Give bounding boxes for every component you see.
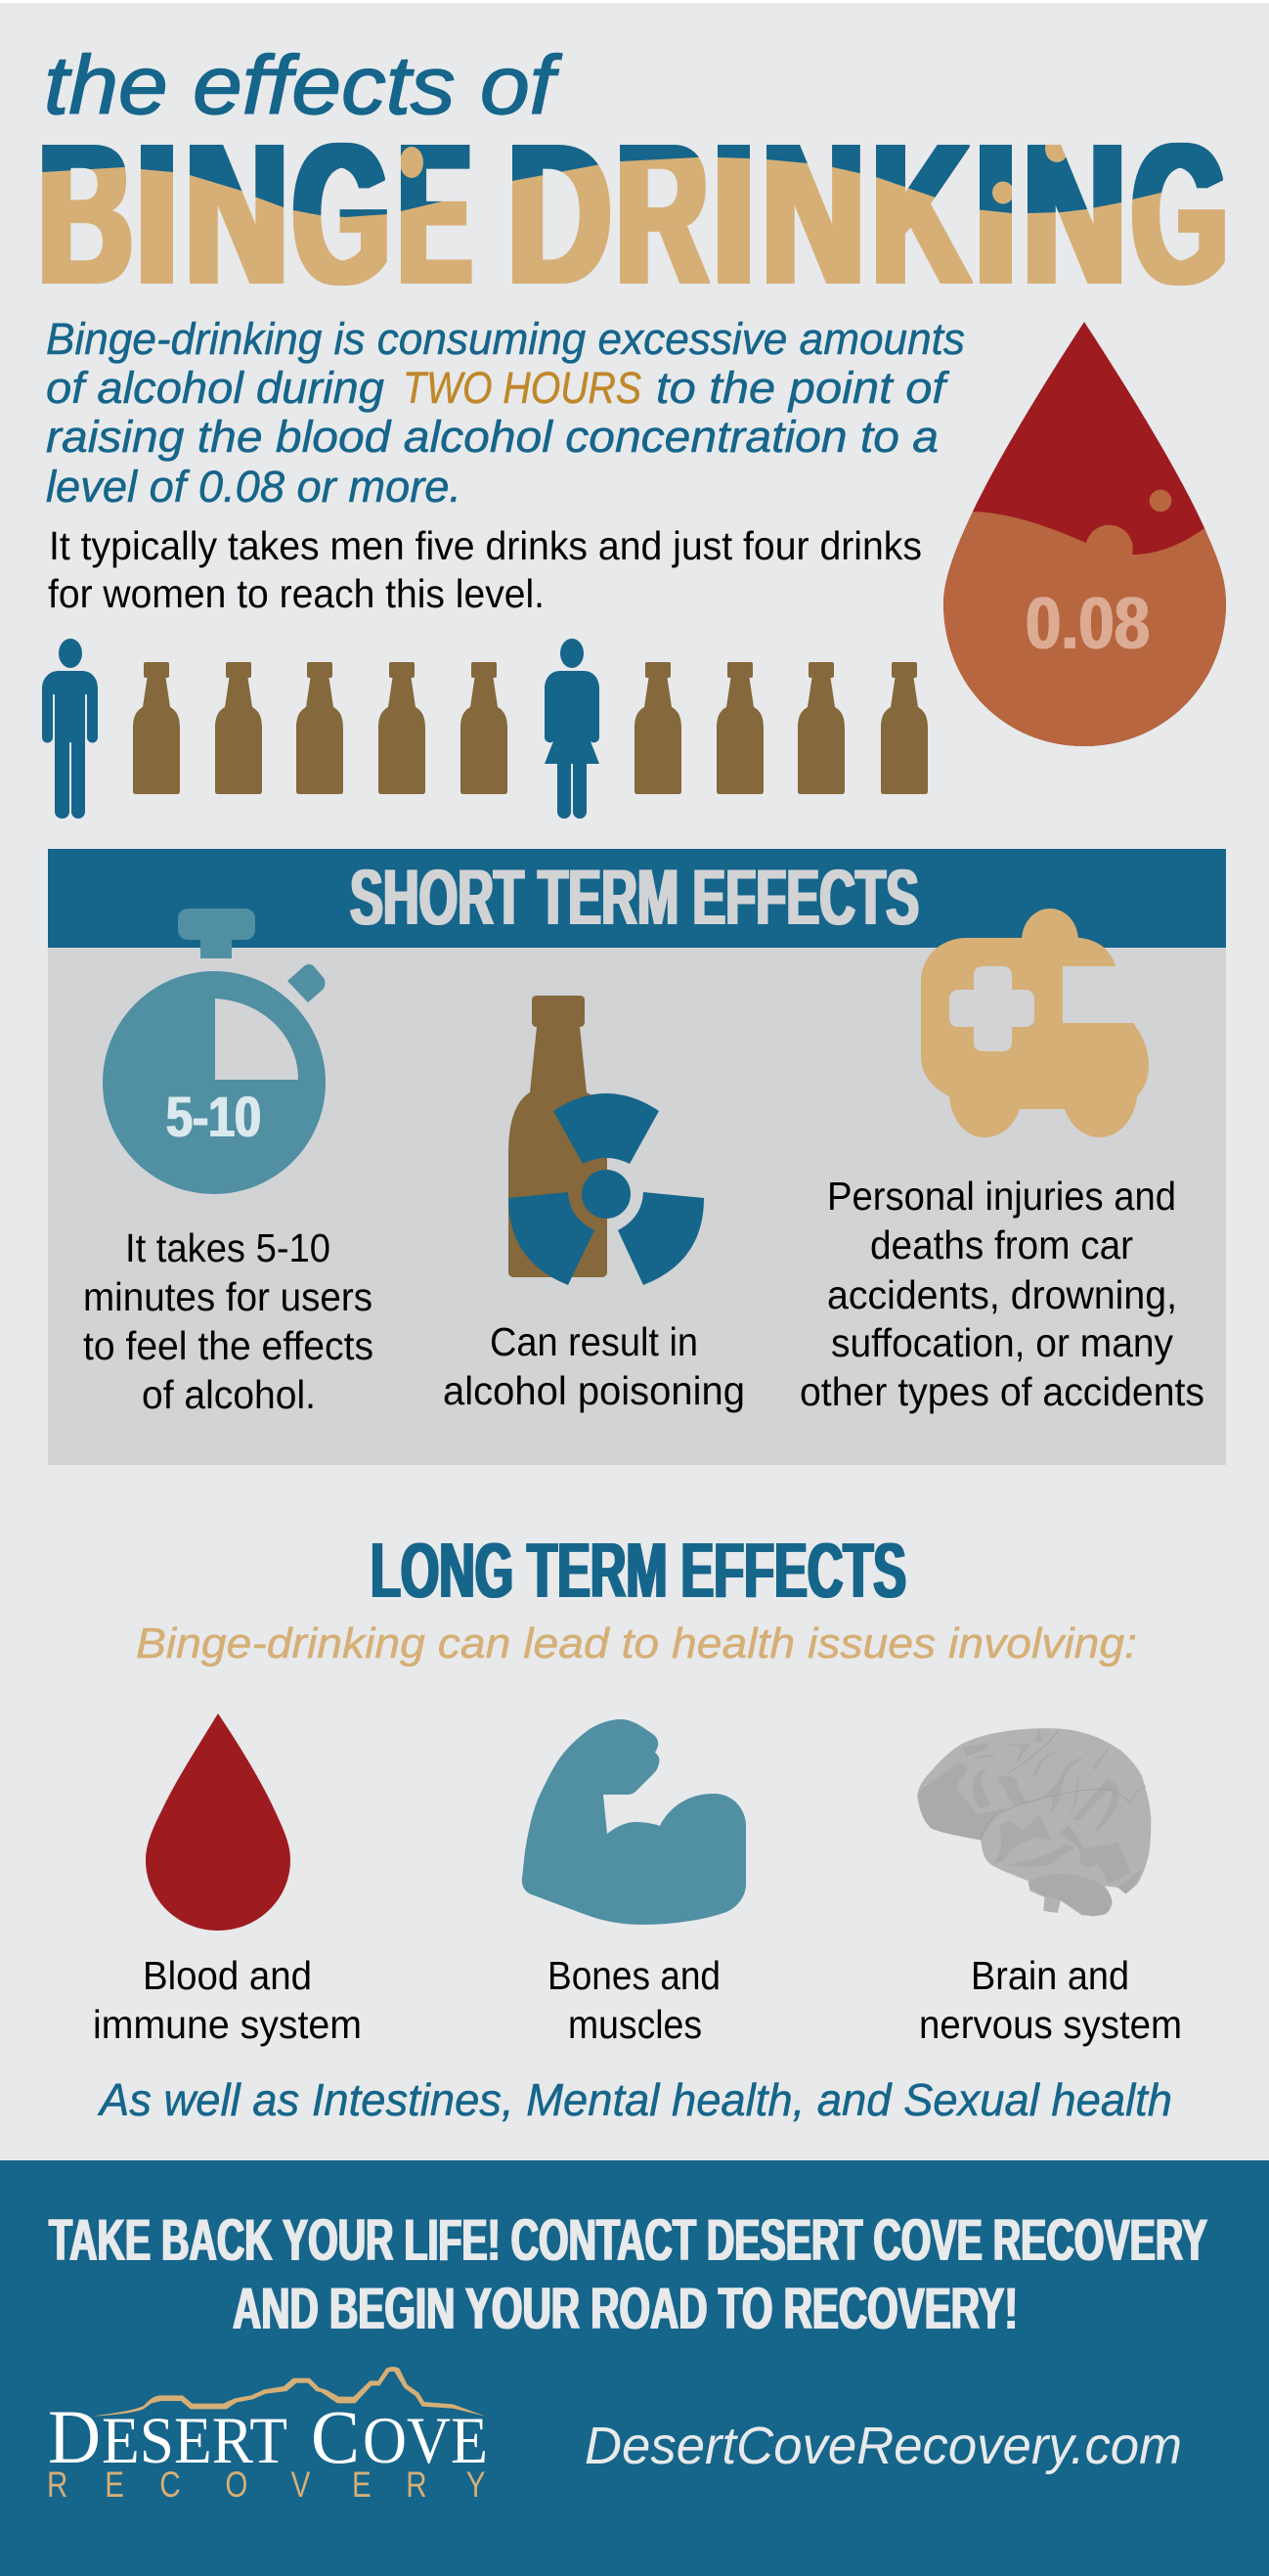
text: 5-10 minutes caption: to feel the effects xyxy=(83,1323,373,1368)
intro definition text: TWO HOURS xyxy=(403,363,641,413)
heading: short term effects: SHORT TERM EFFECTS xyxy=(350,854,919,942)
icon: man with five bottles xyxy=(42,639,507,819)
text: accidents caption xyxy=(800,1174,1204,1414)
panel: footer call to action xyxy=(0,2160,1269,2576)
icon: bottle 6 xyxy=(634,662,681,794)
logo wordmark: ESERT xyxy=(102,2403,287,2477)
icon: woman with four bottles xyxy=(545,639,928,819)
text: brain caption: nervous system xyxy=(919,2002,1182,2047)
logo wordmark: OVE xyxy=(363,2403,488,2477)
text: accidents caption: suffocation, or many xyxy=(831,1320,1173,1365)
icon: man xyxy=(42,639,98,819)
panel: short term effects xyxy=(48,849,1226,1465)
intro definition text xyxy=(46,314,965,511)
text: 5-10 minutes caption: of alcohol. xyxy=(142,1372,316,1417)
text: brain caption: Brain and xyxy=(971,1953,1129,1998)
icon: bottle 2 xyxy=(215,662,262,794)
text: blood caption: Blood and xyxy=(143,1953,312,1998)
title: binge drinking: E xyxy=(399,104,471,326)
logo mountain line xyxy=(93,2367,486,2417)
call to action text xyxy=(49,2207,1207,2341)
intro definition text: level of 0.08 or more. xyxy=(46,462,461,511)
icon: blood drop xyxy=(146,1713,290,1931)
icon: bottle 5 xyxy=(460,662,507,794)
icon: woman xyxy=(545,639,599,819)
logo: desert cove recovery xyxy=(47,2367,488,2506)
icon: bottle with radiation symbol xyxy=(508,996,704,1285)
icon: bottle 3 xyxy=(296,662,343,794)
text: accidents caption: other types of accidents xyxy=(800,1369,1204,1414)
icon: stopwatch xyxy=(103,909,326,1194)
title: the effects of: the effects of xyxy=(44,39,562,131)
icon: bottle 9 xyxy=(881,662,928,794)
intro definition text: of alcohol during xyxy=(46,363,384,413)
title: binge drinking: I xyxy=(712,104,756,326)
text: accidents caption: Personal injuries and xyxy=(827,1174,1176,1219)
title: binge drinking: I xyxy=(135,104,179,326)
icon: brain xyxy=(917,1728,1151,1916)
icon: bottle 7 xyxy=(717,662,764,794)
title: binge drinking: G xyxy=(293,104,390,326)
text: drinks needed to reach level: It typically takes men five drinks and just four drinks xyxy=(49,523,922,568)
icon: blood drop with 0.08: 0.08 xyxy=(1026,582,1150,664)
title: binge drinking: D xyxy=(507,104,611,326)
icon: stopwatch: 5-10 xyxy=(166,1086,261,1149)
text: alcohol poisoning caption xyxy=(443,1319,745,1413)
title: binge drinking: R xyxy=(616,104,708,326)
text: bones caption: Bones and xyxy=(547,1953,721,1998)
title: binge drinking xyxy=(42,143,1225,286)
text: drinks needed to reach level: for women to reach this level. xyxy=(48,571,545,616)
title: binge drinking: K xyxy=(872,104,970,326)
icon: bottle 4 xyxy=(378,662,425,794)
heading: long term effects: LONG TERM EFFECTS xyxy=(371,1527,906,1614)
logo wordmark: C xyxy=(311,2394,360,2479)
text: blood caption xyxy=(93,1953,362,2047)
logo wordmark xyxy=(48,2394,488,2479)
text: 5-10 minutes caption: minutes for users xyxy=(83,1274,372,1319)
intro definition text: to the point of xyxy=(656,363,950,413)
website url: DesertCoveRecovery.com xyxy=(585,2417,1182,2475)
text: 5-10 minutes caption: It takes 5-10 xyxy=(125,1225,330,1270)
icon: ambulance xyxy=(921,909,1149,1137)
text: bones caption: muscles xyxy=(568,2002,702,2047)
intro definition text: Binge-drinking is consuming excessive amounts xyxy=(46,314,965,364)
subheading: health issues: Binge-drinking can lead to health issues involving: xyxy=(136,1620,1137,1667)
text: blood caption: immune system xyxy=(93,2002,362,2047)
header bar xyxy=(48,849,1226,948)
title: binge drinking: I xyxy=(974,104,1018,326)
text: bones caption xyxy=(547,1953,721,2047)
icon: bottle 1 xyxy=(133,662,180,794)
logo recovery line: RECOVERY xyxy=(47,2465,486,2506)
title: binge drinking: N xyxy=(1023,104,1126,326)
icon: flexed arm xyxy=(522,1719,746,1925)
text: other health areas: As well as Intestines, Mental health, and Sexual health xyxy=(97,2074,1172,2125)
logo wordmark: D xyxy=(48,2394,101,2479)
intro definition text: raising the blood alcohol concentration to a xyxy=(46,412,939,462)
text: drinks needed to reach level xyxy=(48,523,922,616)
title: binge drinking: N xyxy=(185,104,288,326)
icon: bottle 8 xyxy=(798,662,845,794)
title: binge drinking: N xyxy=(762,104,865,326)
text: accidents caption: accidents, drowning, xyxy=(827,1272,1177,1317)
text: alcohol poisoning caption: Can result in xyxy=(490,1319,698,1364)
text: 5-10 minutes caption xyxy=(83,1225,373,1417)
title: binge drinking: B xyxy=(38,104,132,326)
icon: blood drop with 0.08 xyxy=(943,322,1226,746)
text: accidents caption: deaths from car xyxy=(870,1222,1133,1267)
text: alcohol poisoning caption: alcohol poisoning xyxy=(443,1368,745,1413)
text: brain caption xyxy=(919,1953,1182,2047)
